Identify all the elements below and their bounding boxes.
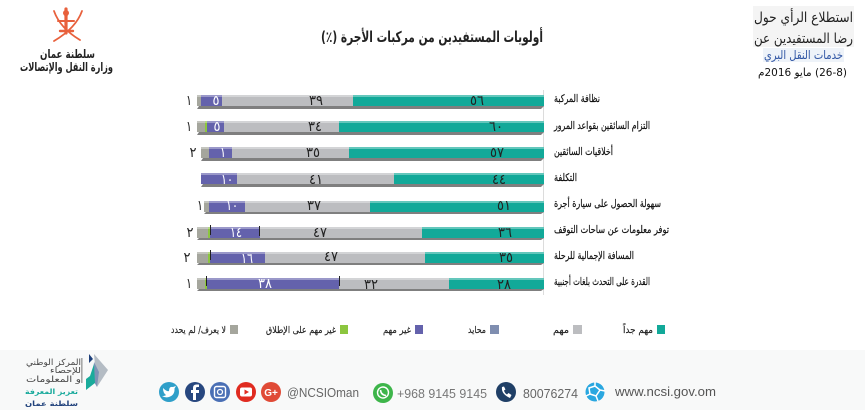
row: ease of getting a taxi: سهولة الحصول على سيارة أجرة (554, 196, 661, 210)
heading line 3: خدمات النقل البري (764, 48, 843, 63)
row: ability to speak foreign languages (186, 274, 650, 293)
row: drivers' ethics: ٥٧ (490, 145, 504, 161)
icon: Twitter (159, 382, 179, 402)
row: drivers obeying traffic rules (186, 119, 650, 135)
survey heading box (753, 6, 854, 79)
legend: لا يعرف/ لم يحدد (171, 325, 226, 336)
row: ability to speak foreign languages: القدرة على التحدث بلغات أجنبية (554, 274, 650, 288)
phone number: 80076274 (523, 386, 578, 401)
row: ability to speak foreign languages: ٢٨ (497, 277, 511, 293)
row: cost: ٤٤ (492, 172, 506, 188)
icon: Google Plus (261, 382, 281, 402)
icon: Facebook (185, 382, 205, 402)
row: ability to speak foreign languages: ٣٢ (364, 277, 378, 293)
NCSI logo: و المعلومات (26, 375, 81, 385)
row: drivers obeying traffic rules: ٦٠ (489, 119, 503, 135)
NCSI logo: المركز الوطني (26, 358, 81, 368)
legend: محايد (468, 325, 486, 336)
legend: غير مهم على الإطلاق (266, 325, 336, 336)
row: total trip distance: ٣٥ (499, 250, 513, 266)
icon: Instagram (210, 382, 230, 402)
row: vehicle cleanliness: ٥ (212, 93, 220, 109)
icon: Google Plus: G+ (264, 388, 278, 399)
website: www.ncsi.gov.om (614, 384, 716, 399)
icon: Oman emblem (54, 9, 82, 41)
icon: YouTube (236, 382, 256, 402)
survey date: (26-8) مايو 2016م (758, 66, 847, 79)
row: drivers' ethics: ٢ (190, 145, 196, 161)
WhatsApp number: +968 9145 9145 (397, 386, 487, 401)
NCSI logo: سلطنة عمان (25, 400, 78, 408)
row: vehicle cleanliness: ٣٩ (309, 93, 323, 109)
icon: phone (496, 382, 516, 402)
logo text: Sultanate of Oman: سلطنة عمان (40, 47, 95, 61)
row: information on parking areas: ٤٧ (313, 225, 327, 241)
legend: غير مهم (383, 325, 411, 336)
social handle: @NCSIOman (287, 385, 359, 400)
NCSI logo: للإحصاء (50, 366, 81, 376)
row: vehicle cleanliness: ١ (186, 93, 192, 109)
row: information on parking areas: ٣٦ (498, 225, 512, 241)
row: ease of getting a taxi: ٣٧ (307, 198, 321, 214)
logo text: ministry name: وزارة النقل والإتصالات (20, 60, 113, 75)
icon: WhatsApp (373, 383, 393, 403)
row: ease of getting a taxi: ١ (197, 198, 203, 214)
row: cost: ٤١ (309, 172, 323, 188)
row: total trip distance: ١٦ (241, 251, 253, 267)
row: ability to speak foreign languages: ١ (186, 276, 192, 292)
heading line 1: استطلاع الرأي حول (754, 8, 853, 26)
row: drivers obeying traffic rules: ٣٤ (308, 119, 322, 135)
row: cost: ١٠ (221, 172, 233, 188)
footer band (0, 350, 865, 410)
logo: Ministry of Transport and Communications (20, 9, 113, 75)
row: information on parking areas: ٢ (186, 225, 194, 241)
row: ease of getting a taxi (197, 196, 661, 214)
NCSI logo: تعزيز المعرفة (25, 388, 78, 396)
row: drivers obeying traffic rules: التزام السائقين بقواعد المرور (553, 120, 650, 132)
row: drivers' ethics: ٣٥ (306, 145, 320, 161)
row: drivers' ethics: ١ (220, 145, 226, 161)
row: total trip distance: ٢ (184, 250, 190, 266)
row: information on parking areas (186, 224, 669, 241)
row: vehicle cleanliness: ٥٦ (470, 93, 484, 109)
row: vehicle cleanliness: نظافة المركبة (554, 93, 600, 105)
row: information on parking areas: ١٤ (230, 225, 242, 241)
row: vehicle cleanliness (186, 93, 600, 109)
row: drivers obeying traffic rules: ١ (186, 119, 192, 135)
NCSI logo (25, 354, 108, 408)
row: ease of getting a taxi: ١٠ (226, 198, 238, 214)
stacked bar chart (184, 90, 669, 295)
legend: مهم (553, 325, 569, 336)
row: ease of getting a taxi: ٥١ (497, 198, 511, 214)
row: total trip distance: ٤٧ (324, 249, 338, 265)
row: drivers' ethics (190, 144, 613, 161)
row: cost: التكلفة (554, 172, 577, 184)
icon: globe (586, 382, 605, 402)
row: total trip distance: المسافة الإجمالية للرحلة (554, 250, 634, 262)
row: drivers obeying traffic rules: ٥ (214, 119, 220, 135)
title: أولويات المستفيدين من مركبات الأجرة (٪) (321, 27, 543, 46)
row: drivers' ethics: أخلاقيات السائقين (554, 144, 613, 158)
row: ability to speak foreign languages: ٣٨ (258, 276, 272, 292)
legend (171, 323, 665, 336)
row: information on parking areas: توفر معلومات عن ساحات التوقف (554, 224, 669, 236)
row: total trip distance (184, 249, 634, 267)
legend: مهم جداً (623, 323, 653, 336)
row: cost (201, 172, 577, 188)
